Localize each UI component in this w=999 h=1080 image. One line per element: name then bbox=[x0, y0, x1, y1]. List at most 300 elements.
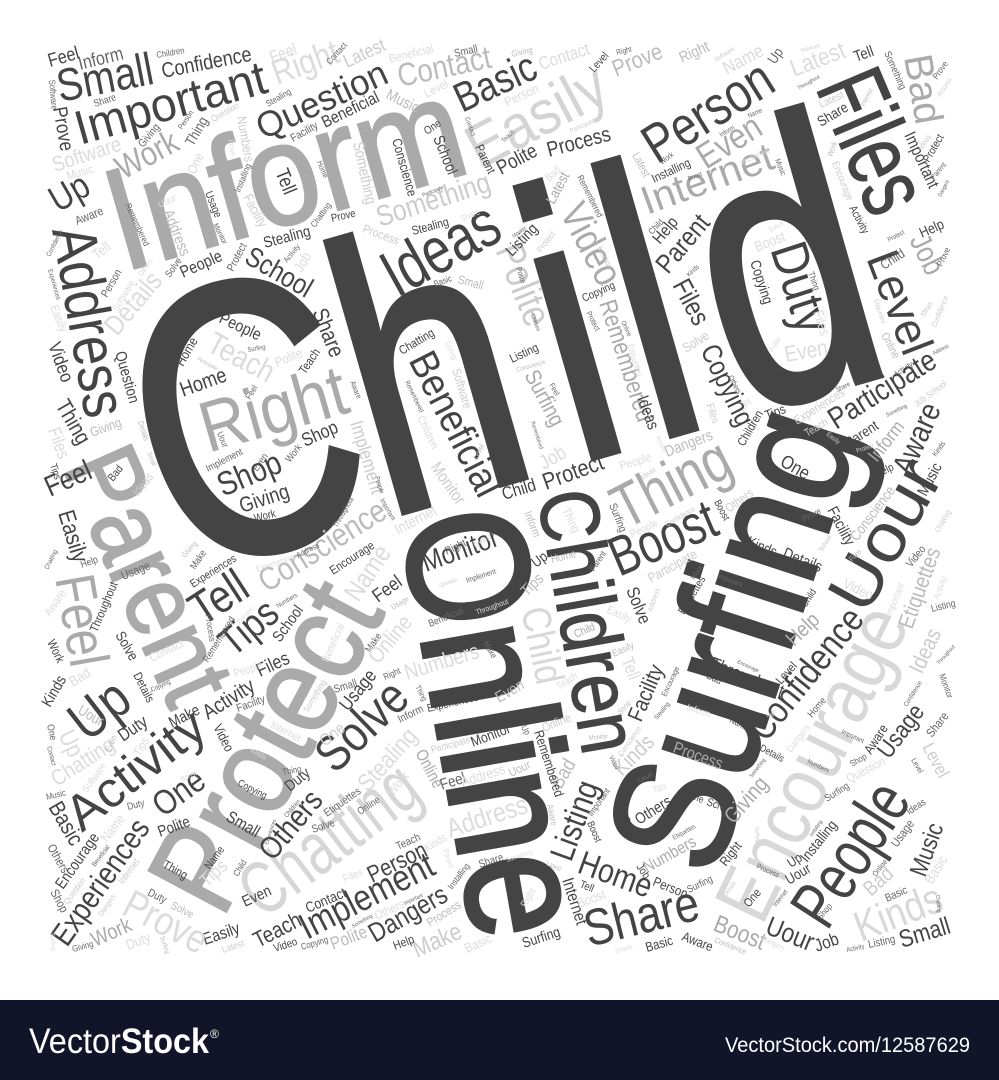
small words: lower right region: Installing bbox=[797, 817, 840, 865]
small words: upper left region: Aware bbox=[348, 379, 364, 400]
small words: lower right region: Participate bbox=[645, 546, 700, 586]
small words: lower left region: Usage bbox=[389, 594, 411, 612]
small words: lower left region: Contact bbox=[45, 746, 57, 767]
registered mark: ® bbox=[210, 1027, 219, 1041]
small words: lower left region: Work bbox=[253, 508, 278, 525]
small words: upper left region: Surfing bbox=[247, 343, 267, 354]
small words: lower left region: One bbox=[145, 760, 212, 824]
small words: upper left region: Contact bbox=[463, 116, 477, 137]
small words: upper right region: Prove bbox=[934, 245, 952, 268]
small words: lower left region: Numbers bbox=[401, 639, 482, 685]
small words: lower right region: Surfing bbox=[753, 827, 761, 842]
small words: lower right region: Confidence bbox=[741, 599, 872, 748]
small words: lower right region: Activity bbox=[931, 574, 950, 601]
small words: upper left region: Tell bbox=[89, 238, 114, 263]
small words: lower left region: One bbox=[45, 723, 59, 741]
small words: lower right region: Child bbox=[513, 602, 573, 688]
small words: lower left region: Activity bbox=[198, 674, 259, 725]
small words: upper left region: Software bbox=[47, 79, 60, 110]
small words: lower left region: Internet bbox=[392, 502, 440, 539]
small words: lower left region: Solve bbox=[304, 668, 419, 783]
small words: lower right region: Implement bbox=[716, 573, 744, 589]
small words: upper right region: Listing bbox=[508, 341, 541, 366]
small words: upper right region: Easily bbox=[825, 431, 842, 447]
small words: upper left region: Software bbox=[49, 133, 124, 177]
small words: lower left region: Kinds bbox=[423, 832, 449, 855]
small words: lower right region: School bbox=[818, 535, 834, 553]
small words: lower left region: Copying bbox=[236, 777, 269, 801]
word: Level: Level bbox=[857, 243, 944, 361]
small words: lower right region: Level bbox=[909, 756, 926, 775]
small words: lower left region: Contact bbox=[148, 637, 186, 665]
small words: lower left region: Usage bbox=[335, 665, 381, 715]
small words: upper right region: Participate bbox=[822, 343, 942, 435]
small words: lower right region: Bad bbox=[859, 862, 898, 901]
small words: lower right region: Numbers bbox=[728, 714, 760, 737]
small words: upper left region: Solve bbox=[163, 256, 184, 279]
small words: upper left region: Teach bbox=[201, 326, 280, 390]
small words: lower right region: Important bbox=[883, 581, 907, 619]
word: Files: Files bbox=[796, 53, 951, 229]
small words: upper right region: Help bbox=[873, 462, 896, 481]
small words: lower left region: Facility bbox=[235, 694, 268, 715]
small words: upper left region: Music bbox=[383, 86, 422, 117]
small words: lower left region: Make bbox=[408, 917, 466, 963]
small words: upper right region: Bad bbox=[895, 51, 951, 127]
word: Activity: Activity bbox=[54, 698, 216, 842]
small words: upper right region: Throughout bbox=[797, 74, 822, 92]
small words: upper left region: Video bbox=[44, 339, 78, 385]
small words: upper left region: One bbox=[422, 118, 444, 138]
small words: upper right region: Inform bbox=[863, 416, 909, 466]
small words: lower left region: Monitor bbox=[417, 520, 503, 578]
word: Ideas: Ideas bbox=[368, 185, 512, 310]
small words: lower left region: Video bbox=[272, 936, 299, 955]
small words: lower left region: Teach bbox=[394, 832, 423, 853]
small words: upper left region: Teach bbox=[297, 346, 323, 377]
small words: upper right region: Confidence bbox=[929, 294, 951, 329]
small words: lower right region: Confidence bbox=[902, 679, 924, 708]
small words: upper left region: Level bbox=[422, 78, 451, 101]
small words: lower right region: Etiquettes bbox=[671, 823, 697, 842]
small words: upper left region: Share bbox=[458, 206, 482, 224]
small words: lower left region: Make bbox=[363, 631, 384, 654]
small words: lower left region: Boost bbox=[179, 768, 198, 784]
small words: lower left region: Make bbox=[166, 702, 203, 732]
small words: lower left region: Surfing bbox=[158, 935, 171, 955]
small words: upper right region: Job bbox=[903, 228, 951, 280]
small words: lower left region: Feel bbox=[438, 770, 468, 794]
small words: lower right region: Surfing bbox=[685, 873, 714, 895]
small words: upper right region: Children bbox=[529, 314, 541, 332]
small words: lower left region: School bbox=[270, 603, 307, 646]
small words: upper right region: Activity bbox=[654, 435, 668, 455]
small words: lower left region: Name bbox=[98, 812, 128, 845]
small words: lower right region: Right bbox=[519, 886, 538, 909]
small words: upper right region: Implement bbox=[739, 146, 771, 167]
small words: lower right region: School bbox=[705, 797, 736, 817]
small words: lower left region: Children bbox=[283, 798, 303, 819]
small words: lower right region: Activity bbox=[846, 943, 866, 954]
small words: lower right region: Surfing bbox=[606, 502, 628, 534]
small words: upper right region: Latest bbox=[817, 90, 846, 111]
small words: upper right region: Protect bbox=[886, 229, 906, 244]
small words: lower right region: Numbers bbox=[806, 758, 830, 775]
small words: upper left region: Right bbox=[266, 32, 344, 92]
small words: upper left region: Beneficial bbox=[319, 88, 382, 132]
small words: upper left region: Polite bbox=[487, 236, 561, 333]
small words: upper right region: Dangers bbox=[662, 427, 715, 461]
word: Question: Question bbox=[249, 52, 394, 147]
small words: upper left region: Participate bbox=[421, 185, 445, 199]
small words: lower left region: Thing bbox=[160, 859, 190, 882]
small words: lower right region: Up bbox=[528, 548, 551, 571]
small words: lower right region: Listing bbox=[865, 612, 884, 625]
small words: upper left region: Address bbox=[159, 207, 193, 259]
small words: upper right region: Right bbox=[677, 39, 712, 67]
small words: upper left region: Inform bbox=[76, 42, 125, 74]
small words: lower left region: Tips bbox=[132, 735, 153, 759]
small words: upper left region: Share bbox=[307, 305, 349, 361]
small words: upper left region: Small bbox=[52, 43, 158, 113]
small words: lower right region: Details bbox=[722, 880, 738, 898]
small words: upper right region: One bbox=[777, 450, 814, 484]
small words: lower left region: Address bbox=[295, 540, 321, 560]
small words: upper left region: Aware bbox=[73, 205, 105, 228]
small words: upper right region: Protect bbox=[922, 133, 947, 165]
small words: upper left region: Level bbox=[470, 442, 487, 461]
small words: lower right region: Online bbox=[870, 857, 890, 878]
small words: lower right region: Surfing bbox=[822, 780, 851, 804]
small words: lower left region: Others bbox=[252, 784, 330, 867]
small words: upper left region: Work bbox=[283, 442, 304, 464]
small words: lower left region: Address bbox=[459, 761, 507, 790]
small words: lower left region: Conscience bbox=[252, 493, 393, 599]
small words: upper left region: Giving bbox=[88, 415, 124, 440]
small words: upper left region: Person bbox=[100, 267, 125, 300]
small words: upper right region: Job School bbox=[912, 378, 949, 409]
small words: upper right region: Parent bbox=[842, 417, 881, 451]
small words: upper right region: Process bbox=[936, 77, 954, 98]
small words: lower left region: Music bbox=[45, 787, 67, 802]
small words: upper left region: People bbox=[216, 309, 264, 345]
small words: lower right region: Home bbox=[805, 695, 828, 719]
small words: lower left region: Small bbox=[223, 808, 263, 842]
small words: lower left region: Duty bbox=[124, 929, 153, 953]
small words: lower left region: Stealing bbox=[351, 722, 423, 797]
small words: upper left region: Details bbox=[136, 420, 152, 442]
small words: lower right region: Details bbox=[780, 545, 824, 576]
small words: lower right region: Ideas bbox=[904, 796, 928, 817]
small words: lower left region: One bbox=[316, 719, 349, 750]
small words: upper left region: Shop bbox=[211, 443, 287, 504]
small words: lower right region: Facility bbox=[623, 661, 669, 725]
small words: lower right region: Boost bbox=[712, 498, 732, 523]
small words: lower left region: Duty bbox=[114, 711, 152, 746]
small words: upper left region: Prove bbox=[226, 139, 238, 157]
small words: lower left region: Dangers bbox=[96, 892, 118, 918]
word: Thing: Thing bbox=[600, 424, 743, 542]
small words: upper right region: Polite bbox=[514, 266, 528, 284]
small words: lower left region: Name bbox=[338, 539, 397, 607]
small words: lower left region: Remembered bbox=[201, 615, 237, 664]
small words: lower right region: People bbox=[628, 518, 660, 541]
small words: upper right region: Solve bbox=[766, 218, 785, 235]
small words: upper left region: Children bbox=[156, 45, 186, 60]
small words: upper right region: Participate bbox=[569, 117, 597, 135]
word: Child: d bbox=[641, 33, 922, 496]
small words: upper right region: Protect bbox=[855, 442, 875, 455]
small words: upper left region: Feel bbox=[39, 454, 97, 503]
small words: upper left region: School bbox=[240, 240, 319, 304]
word: Child: C bbox=[80, 180, 409, 657]
small words: upper right region: Parent bbox=[928, 160, 948, 181]
small words: lower left region: Feel bbox=[368, 571, 406, 606]
footer bar bbox=[0, 1000, 999, 1080]
small words: upper right region: Duty bbox=[735, 395, 753, 416]
small words: lower left region: Share bbox=[477, 852, 505, 871]
small words: upper right region: Name bbox=[719, 39, 767, 79]
small words: upper right region: Address bbox=[932, 343, 951, 357]
small words: lower right region: Encourage bbox=[736, 659, 760, 674]
small words: lower left region: Contact bbox=[303, 884, 349, 916]
word: Parent: Parent bbox=[41, 429, 257, 721]
small words: upper right region: Installing bbox=[650, 157, 693, 186]
small words: upper left region: Participate bbox=[196, 356, 219, 372]
small words: lower right region: Name bbox=[680, 787, 705, 805]
small words: lower left region: Details bbox=[130, 671, 156, 705]
small words: lower right region: Installing bbox=[808, 819, 825, 838]
small words: upper right region: Ideas bbox=[916, 132, 933, 151]
small words: upper right region: Remembered bbox=[529, 421, 544, 450]
small words: upper left region: Latest bbox=[340, 34, 389, 72]
small words: lower right region: Right bbox=[717, 838, 745, 869]
word: Easily: Easily bbox=[454, 51, 619, 182]
small words: upper right region: Activity bbox=[846, 204, 871, 237]
small words: lower right region: Video bbox=[841, 575, 876, 603]
small words: lower left region: Up bbox=[56, 667, 143, 753]
small words: lower right region: Aware bbox=[861, 722, 891, 757]
small words: lower right region: Something bbox=[749, 757, 767, 779]
word: Chatting: Chatting bbox=[222, 744, 435, 933]
small words: upper left region: Question bbox=[209, 100, 241, 124]
word: People: People bbox=[776, 767, 925, 940]
word: Child: h bbox=[286, 134, 568, 598]
small words: upper left region: Stealing bbox=[262, 223, 312, 252]
small words: lower left region: Bad bbox=[66, 664, 93, 690]
small words: upper left region: Home bbox=[177, 363, 230, 402]
small words: upper left region: Installing bbox=[232, 162, 253, 194]
small words: lower left region: Copying bbox=[299, 934, 330, 952]
small words: lower right region: Internet bbox=[772, 888, 790, 908]
small words: lower right region: Tell bbox=[765, 707, 779, 721]
word: Online: Online bbox=[364, 493, 627, 951]
small words: lower right region: Etiquettes bbox=[894, 544, 946, 632]
small words: lower right region: One bbox=[742, 887, 764, 910]
small words: lower right region: Facility bbox=[823, 504, 858, 549]
small words: lower left region: Person bbox=[363, 836, 431, 888]
small words: upper left region: Facility bbox=[289, 120, 321, 145]
small words: lower left region: Files bbox=[341, 867, 365, 886]
small words: lower right region: Teach bbox=[554, 670, 579, 692]
small words: upper left region: Chatting bbox=[397, 327, 437, 358]
small words: upper right region: Copying bbox=[694, 339, 761, 431]
word: Uour: Uour bbox=[813, 446, 958, 624]
small words: lower right region: Tell bbox=[578, 879, 595, 895]
small words: lower left region: Others bbox=[373, 898, 407, 923]
small words: upper left region: Usage bbox=[202, 190, 223, 220]
small words: lower right region: Aware bbox=[680, 929, 715, 955]
small words: lower left region: Right bbox=[381, 665, 403, 682]
small words: lower left region: Address bbox=[443, 790, 531, 844]
small words: lower right region: Basic bbox=[644, 933, 675, 955]
small words: upper right region: Kinds bbox=[685, 263, 701, 279]
small words: upper right region: Work bbox=[657, 149, 676, 167]
small words: lower right region: Ideas bbox=[904, 625, 947, 677]
word: Address: Address bbox=[38, 220, 140, 422]
small words: upper left region: Even bbox=[250, 451, 270, 473]
small words: lower right region: Child bbox=[572, 621, 597, 641]
small words: lower left region: Even bbox=[471, 531, 493, 550]
small words: upper right region: Software bbox=[713, 45, 737, 64]
small words: upper right region: Prove bbox=[608, 37, 666, 82]
small words: upper left region: Person bbox=[176, 108, 196, 131]
small words: lower left region: Question bbox=[439, 577, 459, 589]
small words: upper right region: Level bbox=[588, 50, 612, 75]
small words: lower right region: Conscience bbox=[616, 724, 643, 758]
word: Protect: Protect bbox=[120, 558, 411, 933]
small words: lower left region: Internet bbox=[116, 856, 142, 886]
small words: upper right region: Solve bbox=[680, 328, 712, 356]
small words: lower left region: Question bbox=[61, 875, 88, 906]
small words: upper right region: Teach bbox=[500, 128, 517, 145]
small words: lower right region: Share bbox=[924, 710, 952, 740]
small words: upper left region: Parent bbox=[472, 143, 498, 177]
small words: upper right region: Monitor bbox=[511, 225, 528, 240]
small words: lower left region: Parent bbox=[441, 848, 456, 869]
small words: upper left region: Something bbox=[372, 166, 494, 233]
footer logo: VectorStock: VectorStock bbox=[29, 1022, 209, 1061]
small words: upper right region: Latest bbox=[543, 169, 573, 207]
small words: upper left region: Share bbox=[92, 92, 117, 109]
small words: upper left region: Easily bbox=[47, 303, 70, 334]
footer image id: VectorStock.com/12587629 bbox=[725, 1034, 970, 1057]
small words: lower left region: Easily bbox=[53, 507, 94, 566]
small words: upper left region: Contact bbox=[394, 40, 495, 94]
small words: upper right region: Process bbox=[544, 122, 613, 162]
small words: upper right region: Internet bbox=[635, 135, 780, 223]
small words: upper right region: Children bbox=[736, 408, 766, 449]
small words: lower left region: Shop bbox=[47, 887, 70, 915]
small words: upper left region: Files bbox=[44, 424, 74, 462]
small words: upper right region: Boost bbox=[752, 228, 788, 255]
small words: upper left region: Ideas bbox=[130, 471, 156, 499]
small words: lower right region: Details bbox=[758, 742, 786, 764]
small words: upper left region: Uour bbox=[156, 192, 178, 210]
small words: lower left region: Uour bbox=[75, 702, 107, 729]
small words: lower left region: Internet bbox=[268, 719, 303, 745]
small words: lower right region: Shop bbox=[615, 698, 633, 716]
small words: lower left region: Something bbox=[301, 677, 329, 714]
small words: lower left region: Process bbox=[203, 614, 218, 642]
small words: lower right region: Bad bbox=[545, 754, 580, 792]
small words: lower left region: Implement bbox=[292, 845, 442, 948]
small words: lower right region: Important bbox=[840, 728, 865, 745]
small words: upper left region: Remembered bbox=[403, 380, 425, 414]
small words: lower left region: Up bbox=[53, 725, 90, 761]
small words: upper left region: People bbox=[373, 475, 385, 495]
small words: lower right region: Uour bbox=[507, 759, 533, 780]
small words: lower right region: Inform bbox=[690, 564, 705, 581]
small words: upper right region: Kinds bbox=[930, 439, 948, 458]
small words: lower right region: Boost bbox=[710, 909, 771, 955]
word: Child: l bbox=[554, 85, 739, 521]
small words: upper left region: Small bbox=[456, 274, 485, 293]
small words: lower left region: Latest bbox=[220, 937, 246, 955]
small words: lower right region: Level bbox=[918, 739, 953, 781]
small words: lower right region: Conscience bbox=[847, 483, 898, 544]
small words: lower left region: Work bbox=[44, 638, 66, 665]
small words: lower right region: Bad bbox=[705, 670, 723, 686]
small words: lower right region: Small bbox=[768, 499, 794, 520]
small words: upper left region: Software bbox=[111, 279, 137, 313]
small words: lower right region: Monitor bbox=[589, 733, 608, 742]
small words: lower right region: Address bbox=[645, 586, 662, 613]
small words: upper right region: Ideas bbox=[918, 299, 935, 318]
small words: upper left region: Small bbox=[145, 451, 157, 467]
small words: lower left region: Person bbox=[234, 604, 256, 626]
small words: upper right region: Feel bbox=[547, 381, 562, 398]
small words: upper left region: Activity bbox=[281, 242, 302, 264]
small words: lower right region: Person bbox=[651, 874, 690, 902]
word: Right: Right bbox=[190, 350, 357, 468]
small words: lower left region: Online bbox=[411, 746, 447, 791]
small words: lower right region: Shop bbox=[718, 611, 745, 631]
small words: lower left region: Help bbox=[392, 933, 416, 953]
small words: upper right region: Beneficial bbox=[595, 245, 613, 271]
small words: upper left region: Polite bbox=[273, 345, 305, 370]
small words: lower right region: Level bbox=[774, 660, 800, 687]
small words: lower right region: Usage bbox=[889, 818, 917, 850]
word: Encourage: Encourage bbox=[697, 591, 926, 934]
small words: lower right region: Numbers bbox=[640, 833, 700, 877]
small words: lower right region: Parent bbox=[587, 548, 609, 573]
small words: upper right region: Latest bbox=[786, 35, 850, 82]
small words: lower left region: Tips bbox=[195, 855, 232, 891]
small words: lower left region: Tell bbox=[180, 560, 258, 636]
small words: lower right region: Dangers bbox=[784, 722, 813, 754]
small words: upper right region: Right bbox=[615, 44, 633, 57]
small words: lower left region: Installing bbox=[445, 861, 472, 891]
small words: lower right region: Small bbox=[895, 911, 954, 953]
small words: upper left region: Conscience bbox=[389, 137, 420, 198]
small words: upper right region: Online bbox=[878, 331, 902, 361]
small words: lower right region: Share bbox=[578, 875, 705, 959]
small words: upper left region: Children bbox=[414, 414, 440, 451]
small words: upper left region: Prove bbox=[49, 105, 79, 153]
small words: lower right region: Confidence bbox=[713, 935, 748, 957]
small words: upper left region: Beneficial bbox=[388, 43, 435, 66]
small words: lower left region: Dangers bbox=[363, 879, 453, 949]
small words: upper left region: Feel bbox=[267, 40, 300, 67]
small words: upper right region: Important bbox=[900, 129, 942, 192]
small words: upper left region: Stealing bbox=[410, 216, 450, 238]
small words: upper right region: Even bbox=[689, 107, 769, 177]
small words: lower right region: Encourage bbox=[659, 665, 682, 698]
small words: lower left region: Throughout bbox=[330, 495, 356, 529]
small words: lower right region: Internet bbox=[558, 876, 590, 928]
small words: lower left region: Numbers bbox=[275, 592, 299, 610]
